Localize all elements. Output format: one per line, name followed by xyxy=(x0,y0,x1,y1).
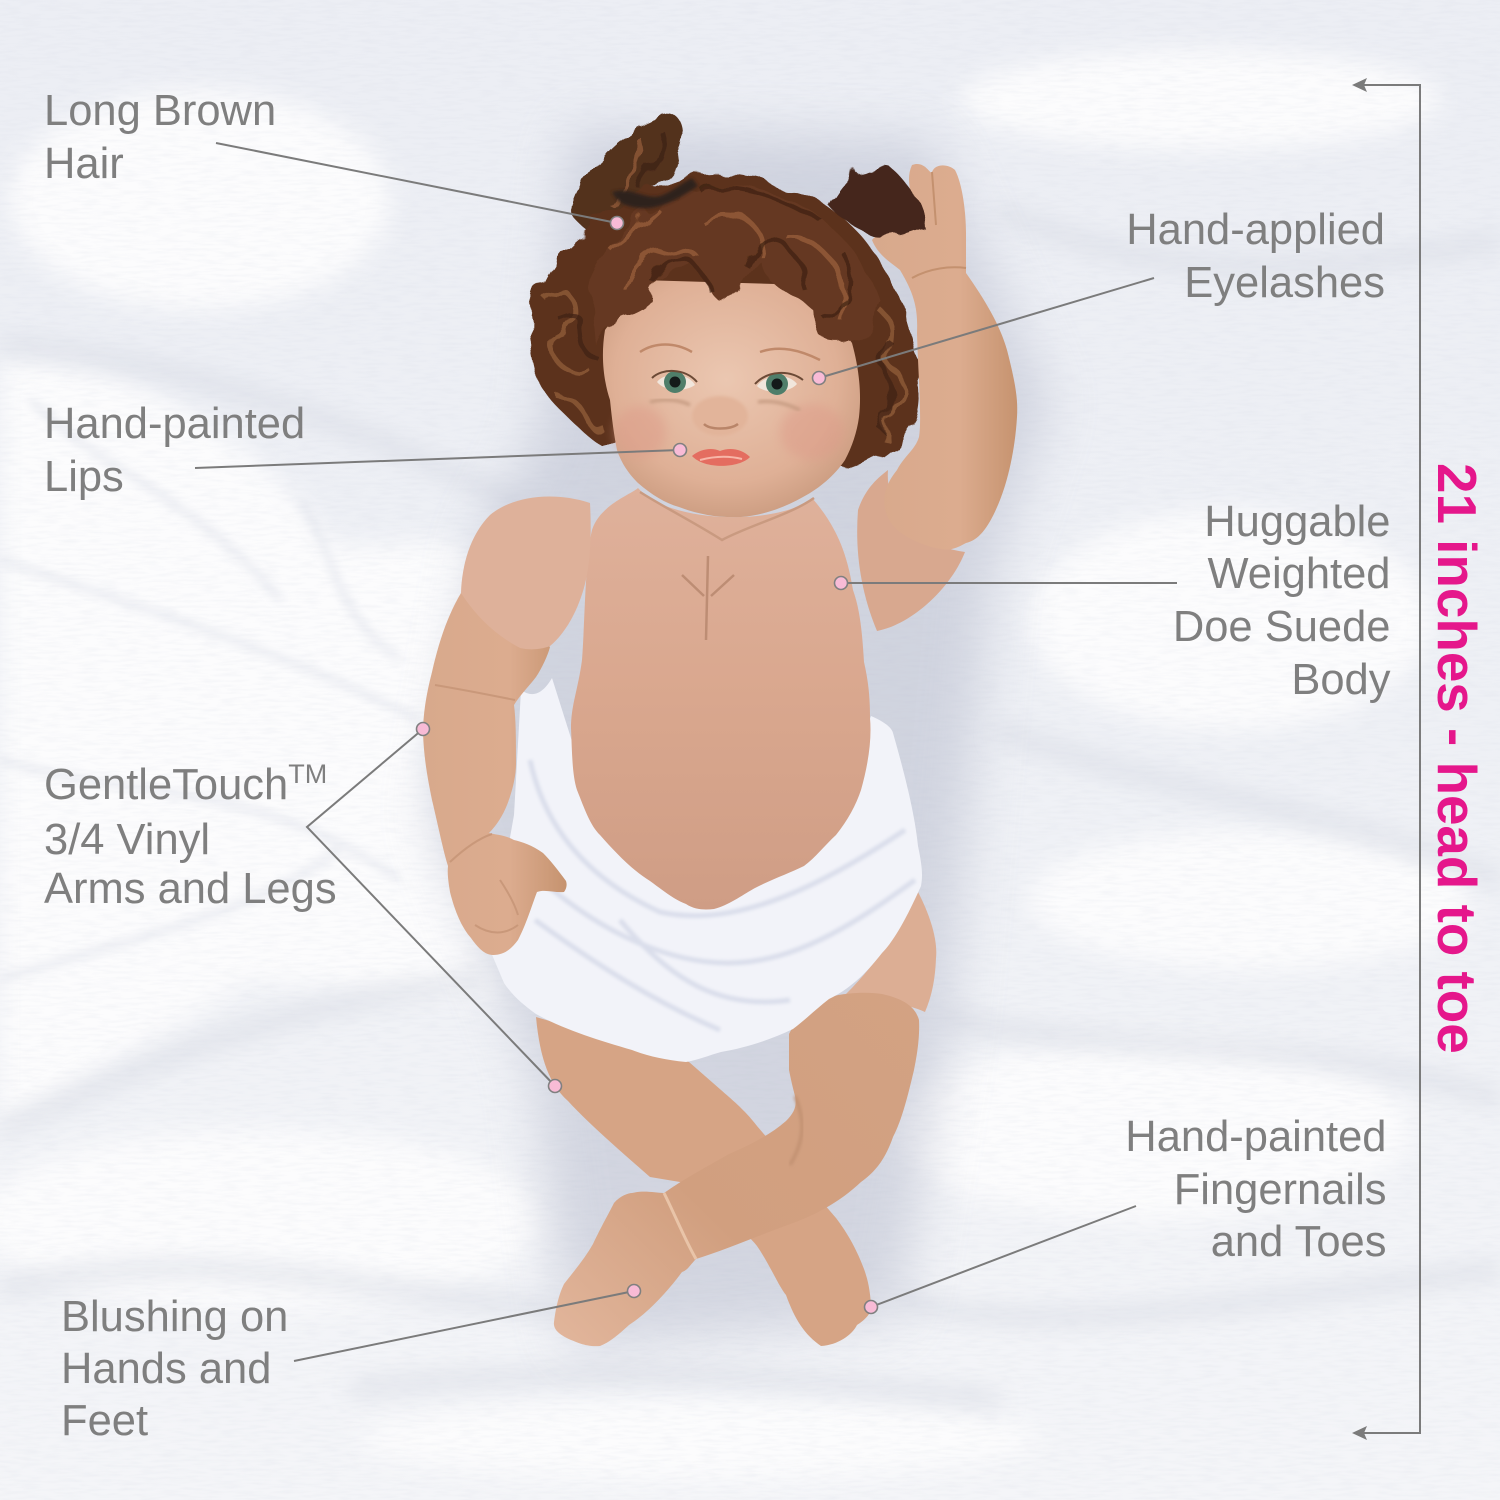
doll xyxy=(423,113,1050,1350)
doll hair back xyxy=(531,113,921,468)
callout: Long Brown Hair: Long Brown xyxy=(44,87,276,135)
doll left sleeve xyxy=(461,497,591,649)
callout: Huggable Weighted Doe Suede Body: Weighted xyxy=(1208,550,1390,598)
callout: GentleTouch 3/4 Vinyl Arms and Legs xyxy=(44,722,562,1092)
callout: Blushing on Hands and Feet xyxy=(61,1284,640,1445)
height label: 21 inches - head to toe xyxy=(1426,463,1488,1054)
doll shadow xyxy=(430,130,1050,1350)
doll right pigtail xyxy=(828,166,924,237)
callout: Hand-painted Fingernails and Toes: Fingernails xyxy=(1174,1166,1386,1214)
doll face xyxy=(603,280,860,517)
doll back leg xyxy=(536,1017,871,1346)
callout: Huggable Weighted Doe Suede Body: Huggable xyxy=(1204,498,1390,546)
callout: Hand-applied Eyelashes: Hand-applied xyxy=(1126,206,1385,254)
callout: GentleTouch 3/4 Vinyl Arms and Legs: GentleTouch xyxy=(44,761,288,809)
callout: Hand-painted Lips: Lips xyxy=(44,453,124,501)
callout: Hand-painted Fingernails and Toes xyxy=(864,1113,1386,1314)
doll left arm xyxy=(423,593,567,955)
doll torso xyxy=(571,488,871,909)
doll hip xyxy=(846,892,936,1012)
callout: Long Brown Hair: Hair xyxy=(44,140,124,188)
callout: Blushing on Hands and Feet: Hands and xyxy=(61,1345,271,1393)
callout: Huggable Weighted Doe Suede Body: Body xyxy=(1291,656,1391,704)
callout: Hand-applied Eyelashes: Eyelashes xyxy=(1184,259,1385,307)
callout: Long Brown Hair xyxy=(44,87,624,230)
callout: Hand-painted Lips xyxy=(44,400,686,501)
callout: Hand-painted Fingernails and Toes: and Toes xyxy=(1211,1218,1386,1266)
callout: Huggable Weighted Doe Suede Body: Doe Suede xyxy=(1173,603,1390,651)
callout: Blushing on Hands and Feet: Blushing on xyxy=(61,1293,288,1341)
callout: GentleTouch 3/4 Vinyl Arms and Legs: TM xyxy=(288,759,327,789)
callout: Blushing on Hands and Feet: Feet xyxy=(61,1397,148,1445)
callout: GentleTouch 3/4 Vinyl Arms and Legs: Arms and Legs xyxy=(44,865,337,913)
callout: Huggable Weighted Doe Suede Body xyxy=(834,498,1391,704)
callout: GentleTouch 3/4 Vinyl Arms and Legs: 3/4 Vinyl xyxy=(44,816,210,864)
callout: Hand-painted Fingernails and Toes: Hand-painted xyxy=(1125,1113,1386,1161)
height bracket arrow xyxy=(1352,78,1420,1440)
doll right sleeve xyxy=(857,470,965,631)
doll wrap: white cloth xyxy=(490,678,922,1062)
doll raised arm xyxy=(872,164,1017,550)
doll hair tie xyxy=(612,178,698,208)
callout: Hand-applied Eyelashes xyxy=(812,206,1385,384)
callout: Hand-painted Lips: Hand-painted xyxy=(44,400,305,448)
doll front leg xyxy=(554,993,919,1346)
doll hair fringe xyxy=(590,185,880,345)
